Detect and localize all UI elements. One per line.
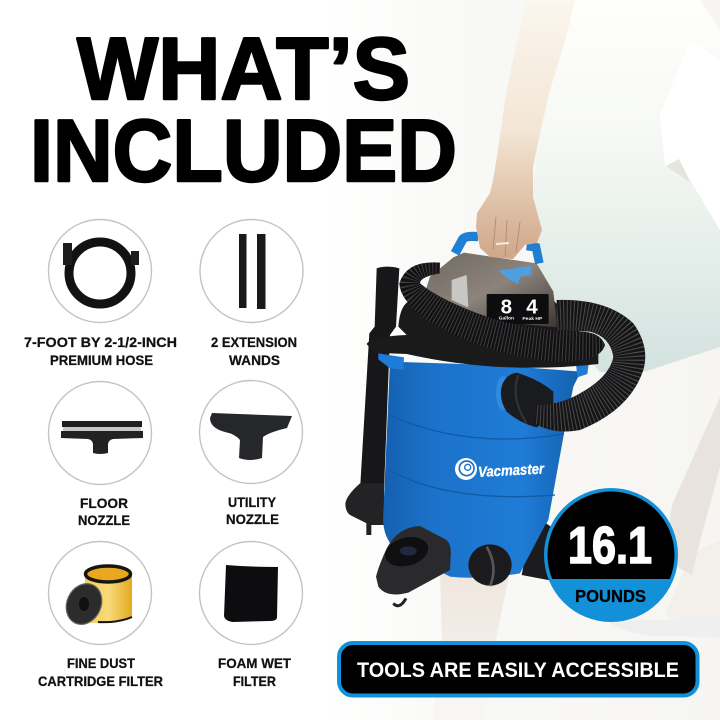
dress	[533, 0, 720, 372]
blue bucket	[378, 353, 589, 578]
drain knob	[468, 544, 512, 586]
ring	[496, 243, 509, 244]
label: WANDS	[229, 353, 280, 368]
label: NOZZLE	[78, 513, 130, 528]
bow shadow	[666, 159, 691, 183]
label: NOZZLE	[226, 512, 279, 527]
arm and hand	[476, 0, 575, 259]
display panel: Gallon	[499, 315, 514, 321]
item: extension wands	[200, 220, 303, 368]
floor shadow	[607, 620, 720, 637]
wand holder and tools	[345, 267, 399, 535]
weight number: 16.1	[568, 517, 652, 575]
icon: cartridge filter	[48, 542, 152, 644]
title	[30, 19, 457, 200]
vacmaster logo: Vacmaster	[478, 461, 546, 481]
label: 7-FOOT BY 2-1/2-INCH	[24, 335, 177, 350]
callout: tools are easily accessible	[339, 643, 698, 696]
right leg	[664, 397, 720, 575]
badge: 16.1 pounds	[544, 488, 678, 622]
icon: floor nozzle	[48, 382, 152, 484]
icon: hose	[48, 220, 152, 322]
badge lower band	[552, 579, 670, 619]
display panel: 4	[526, 295, 538, 318]
hose: top section	[399, 262, 605, 362]
label: FILTER	[233, 674, 276, 689]
vacmaster logo	[455, 458, 546, 481]
display panel: 8	[501, 295, 512, 318]
icon: wands	[200, 220, 303, 322]
motor head	[423, 236, 557, 327]
centre leg	[433, 570, 510, 720]
title: WHAT’S	[77, 19, 410, 118]
label: 2 EXTENSION	[211, 335, 297, 350]
rear caster foot	[522, 523, 567, 582]
callout: tools are easily accessible: TOOLS ARE EASILY ACCESSIBLE	[357, 659, 679, 682]
label: CARTRIDGE FILTER	[38, 674, 163, 689]
label: FINE DUST	[67, 656, 136, 671]
right foot	[665, 540, 720, 626]
icon: utility nozzle	[200, 380, 302, 484]
item: cartridge filter	[38, 542, 163, 689]
label: PREMIUM HOSE	[50, 353, 153, 368]
item: utility nozzle	[200, 380, 302, 527]
title: INCLUDED	[30, 101, 457, 200]
item: floor nozzle	[48, 382, 152, 528]
display panel: Peak HP	[522, 316, 543, 322]
wet dry vacuum	[345, 236, 645, 606]
weight unit: POUNDS	[575, 586, 646, 606]
item: premium hose	[24, 220, 177, 368]
label: FLOOR	[80, 496, 128, 511]
item: foam wet filter	[200, 542, 302, 689]
dress bow highlight	[660, 40, 720, 230]
display panel	[487, 294, 549, 324]
label: FOAM WET	[218, 656, 292, 671]
photo: person's dress and legs, faded	[433, 0, 720, 720]
icon: foam filter	[200, 542, 302, 644]
hose connector	[496, 373, 553, 427]
front caster foot	[376, 526, 451, 606]
label: UTILITY	[228, 495, 276, 510]
hose: outer loop	[535, 300, 645, 431]
lid	[367, 300, 598, 368]
